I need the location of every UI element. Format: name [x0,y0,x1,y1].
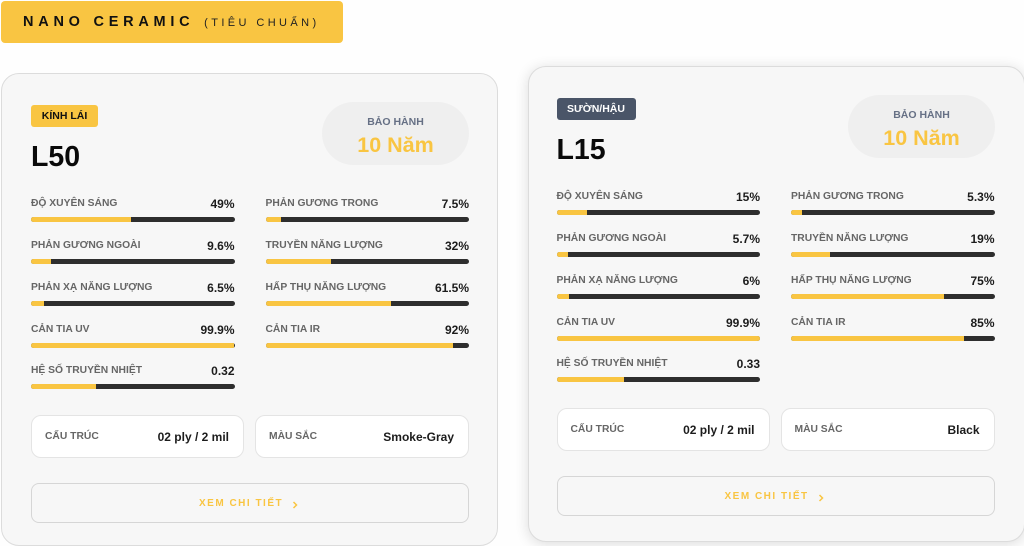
tag: Kính lái [31,104,98,126]
stat: Phản xạ năng lượng [556,274,760,299]
stat: Độ xuyên sáng [556,190,760,215]
warranty label: BẢO HÀNH [893,108,950,120]
stat: Cản tia IR [266,322,469,348]
warranty value: 10 Năm [883,126,960,150]
stat: Hấp thụ năng lượng: 61.5% [435,280,469,294]
box: Màu sắc: MÀU SẮC [794,424,843,434]
stat: Phản gương trong: 7.5% [442,196,469,210]
box: Màu sắc: Smoke-Gray [383,430,454,444]
stat: Phản xạ năng lượng: 6.5% [207,280,234,294]
box: Màu sắc [780,408,994,450]
stat: Phản gương ngoài: 9.6% [207,238,234,252]
stat: Cản tia IR [791,316,995,341]
panel: L15 card [528,66,1024,542]
stat: Hấp thụ năng lượng [791,274,995,299]
stat: Cản tia UV: 99.9% [200,322,234,336]
heading: L15: L15 [556,134,606,166]
stat: Cản tia IR: 92% [445,322,469,336]
stat: Truyền năng lượng [266,238,469,264]
stat: Phản gương ngoài [31,238,235,264]
tag: Sườn/Hậu: SƯỜN/HẬU [567,102,625,114]
box: Cấu trúc: 02 ply / 2 mil [158,430,229,444]
button: Xem chi tiết [556,476,994,516]
warranty pill [848,94,994,158]
button: Xem chi tiết: XEM CHI TIẾT [199,498,283,508]
stat: Hệ số truyền nhiệt: HỆ SỐ TRUYỀN NHIỆT [556,358,668,369]
stat: Phản gương trong [266,196,469,222]
box: Cấu trúc: CẤU TRÚC [45,430,99,442]
box: Màu sắc: MÀU SẮC [269,430,317,442]
title banner [1,1,343,43]
stat: Phản xạ năng lượng: 6% [743,274,760,288]
stat: Truyền năng lượng [791,232,995,257]
stat: Hệ số truyền nhiệt: 0.33 [737,357,760,371]
stat: Hệ số truyền nhiệt [31,364,235,389]
tag: Kính lái: KÍNH LÁI [42,110,87,122]
stat: Truyền năng lượng: 19% [970,232,994,246]
stat: Phản gương ngoài [556,232,760,257]
stat: Cản tia UV: CẢN TIA UV [31,324,90,334]
stat: Hệ số truyền nhiệt: 0.32 [211,364,234,378]
stat: Phản gương ngoài: PHẢN GƯƠNG NGOÀI [31,240,140,250]
stat: Hệ số truyền nhiệt: HỆ SỐ TRUYỀN NHIỆT [31,365,142,376]
stat: Độ xuyên sáng: ĐỘ XUYÊN SÁNG [556,190,643,202]
box: Cấu trúc [31,414,244,458]
stat: Phản gương trong: PHẢN GƯƠNG TRONG [791,190,904,202]
stat: Truyền năng lượng: TRUYỀN NĂNG LƯỢNG [266,240,383,250]
warranty value: 10 Năm [357,132,434,156]
stat: Hấp thụ năng lượng [266,280,469,306]
stat: Phản gương trong: PHẢN GƯƠNG TRONG [266,198,378,208]
stat: Phản gương ngoài: PHẢN GƯƠNG NGOÀI [556,232,666,244]
warranty label: BẢO HÀNH [367,116,424,128]
stat: Hấp thụ năng lượng: HẤP THỤ NĂNG LƯỢNG [791,274,912,286]
title text: NANO CERAMIC (TIÊU CHUẨN) [23,14,320,30]
stat: Truyền năng lượng: 32% [445,238,469,252]
heading: L50: L50 [31,140,80,172]
box: Màu sắc: Black [947,422,980,436]
stat: Phản xạ năng lượng: PHẢN XẠ NĂNG LƯỢNG [31,282,152,292]
tag: Sườn/Hậu [556,98,636,120]
stat: Truyền năng lượng: TRUYỀN NĂNG LƯỢNG [791,232,908,244]
stat: Độ xuyên sáng: ĐỘ XUYÊN SÁNG [31,198,117,208]
stat: Cản tia UV [31,322,235,348]
stat: Cản tia IR: 85% [970,316,994,330]
stat: Cản tia UV: 99.9% [726,316,760,330]
button: Xem chi tiết: XEM CHI TIẾT [724,490,809,502]
stat: Cản tia UV [556,316,760,341]
stat: Hấp thụ năng lượng: HẤP THỤ NĂNG LƯỢNG [266,282,386,292]
box: Màu sắc [255,414,469,458]
stat: Phản xạ năng lượng [31,280,235,306]
button: Xem chi tiết [31,482,469,522]
stat: Độ xuyên sáng [31,196,235,222]
stat: Phản xạ năng lượng: PHẢN XẠ NĂNG LƯỢNG [556,274,678,286]
stat: Phản gương trong: 5.3% [967,190,994,204]
stat: Phản gương ngoài: 5.7% [733,232,760,246]
warranty pill [322,102,469,164]
box: Cấu trúc: 02 ply / 2 mil [683,422,754,436]
stat: Hấp thụ năng lượng: 75% [970,274,994,288]
stat: Phản gương trong [791,190,995,215]
box: Cấu trúc [556,408,770,450]
stat: Hệ số truyền nhiệt [556,356,760,382]
stat: Cản tia UV: CẢN TIA UV [556,316,615,328]
panel: L50 card [1,72,498,546]
stat: Độ xuyên sáng: 15% [736,190,760,204]
stat: Cản tia IR: CẢN TIA IR [791,316,846,328]
stat: Cản tia IR: CẢN TIA IR [266,324,320,334]
box: Cấu trúc: CẤU TRÚC [570,424,624,434]
stat: Độ xuyên sáng: 49% [210,196,234,210]
